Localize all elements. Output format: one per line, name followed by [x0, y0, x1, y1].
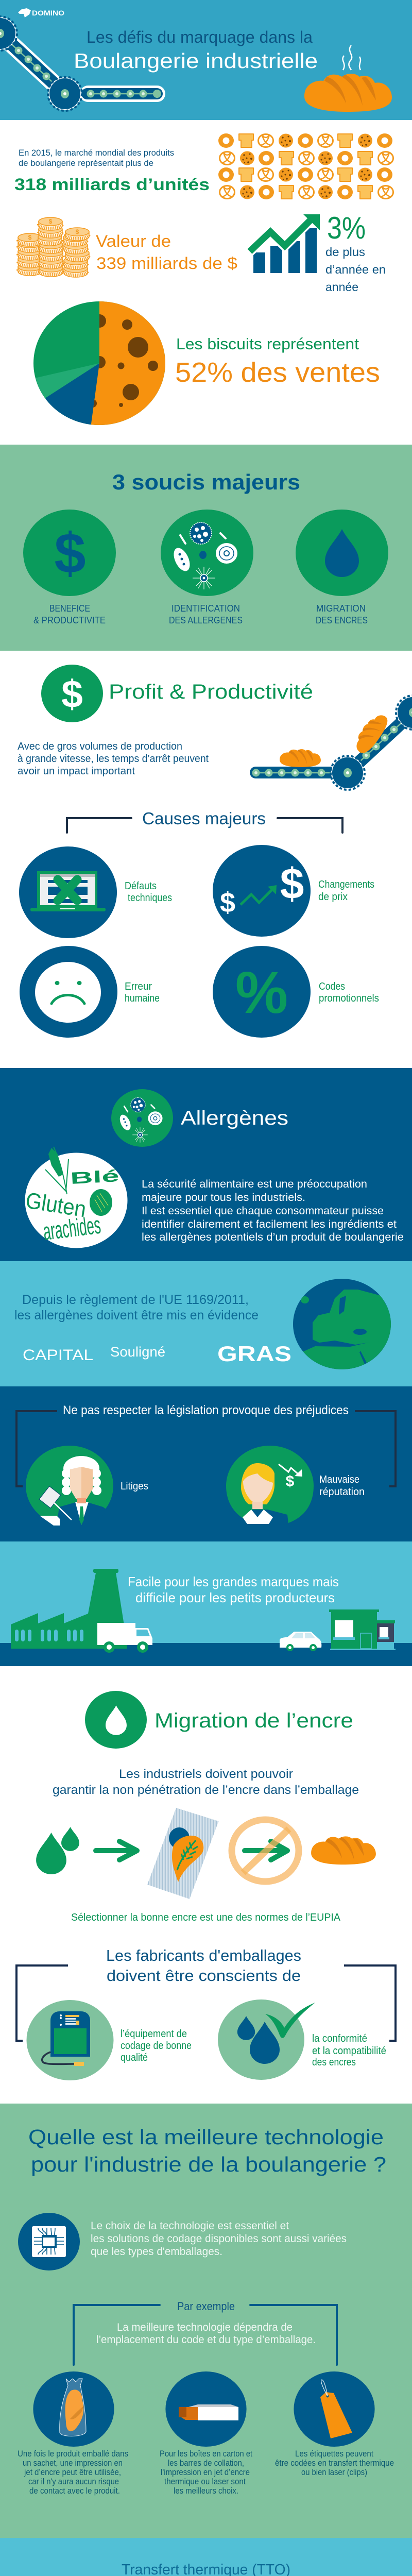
paragraph: La sécurité alimentaire est une préoccupation [142, 1178, 367, 1190]
illustration: car [280, 1632, 321, 1651]
icon: reputation [226, 1446, 314, 1525]
heading: Causes majeurs [142, 809, 266, 828]
icon: germs [111, 1089, 173, 1147]
icon: tag [294, 2371, 375, 2447]
icon: packaging [147, 1808, 218, 1899]
label: changements de prix [318, 879, 374, 903]
panel: migration de l'encre [16, 1691, 396, 2080]
icon: dollar [41, 665, 103, 722]
bracket [74, 2305, 337, 2365]
logo: Domino [18, 8, 64, 18]
title line 2: Boulangerie industrielle [74, 49, 318, 73]
label: allergenes: IDENTIFICATION [171, 603, 240, 614]
paragraph [142, 1178, 404, 1243]
caption: box: Pour les boîtes en carton et [160, 2449, 252, 2459]
icon: globe europe [293, 1279, 391, 1369]
label: benefice [33, 603, 106, 625]
caption: bag: de contact avec le produit. [29, 2486, 120, 2496]
icon: percent: % [235, 960, 288, 1026]
paragraph: à grande vitesse, les temps d’arrêt peuvent [18, 753, 209, 765]
label: encres: DES ENCRES [316, 615, 368, 625]
caption: bag: Une fois le produit emballé dans [18, 2449, 128, 2459]
icon: bread loaf [304, 74, 392, 112]
label: equipement [121, 2028, 192, 2063]
icon: no migration [232, 1820, 299, 1882]
chart: rising bars with arrow [250, 214, 320, 273]
icon: ink drops [36, 1827, 79, 1874]
icon: drop [85, 1691, 147, 1749]
stat: 3 percent growth [325, 211, 386, 294]
caption: box [160, 2449, 252, 2496]
panel: header [0, 0, 412, 120]
paragraph: Les industriels doivent pouvoir [119, 1767, 293, 1781]
text: best technology [96, 2321, 316, 2346]
text: brands: difficile pour les petits producteurs [135, 1590, 335, 1605]
icon: steam [342, 45, 360, 70]
heading: 3 soucis majeurs [112, 470, 300, 494]
icon: dollar: $ [61, 672, 83, 716]
label: defauts techniques [125, 880, 172, 904]
text: market intro [19, 148, 174, 168]
chart: cookie pie [33, 301, 165, 425]
icon: coin stacks [18, 217, 89, 277]
label: conformite [312, 2033, 386, 2068]
label: encres [316, 603, 368, 625]
paragraph: que les types d'emballages. [91, 2246, 222, 2258]
text: best technology: La meilleure technologie dépendra de [117, 2321, 293, 2333]
panel: meilleure technologie [0, 2104, 412, 2538]
stat: 3 percent growth: de plus [325, 245, 365, 259]
heading: Ne pas respecter la législation provoque des préjudices [63, 1403, 349, 1417]
icon: laptop [19, 846, 117, 938]
icon: box [165, 2371, 247, 2447]
icon: compliant drops [218, 1999, 315, 2080]
caption: tag: être codées en transfert thermique [275, 2458, 394, 2468]
label: conformite: des encres [312, 2057, 356, 2068]
panel: 3 soucis majeurs [0, 445, 412, 651]
caption: box: thermique ou laser sont [164, 2477, 246, 2486]
icon: coin stacks: $ [28, 234, 32, 241]
text: biscuits share [175, 335, 380, 388]
heading: Migration de l’encre [154, 1709, 353, 1732]
icon: profit circle: $ [54, 522, 86, 585]
label: benefice: BENEFICE [49, 603, 90, 614]
label: defauts techniques: Défauts [125, 880, 157, 892]
label: equipement: codage de bonne [121, 2040, 192, 2052]
label: par exemple: Par exemple [177, 2300, 235, 2313]
text: market intro: de boulangerie représentait plus de [19, 158, 153, 168]
stat: 3 percent growth: 3% [327, 211, 366, 245]
caption: box: l'impression en jet d’encre [161, 2467, 250, 2477]
label: benefice: & PRODUCTIVITE [33, 615, 106, 625]
icon: sad face [20, 946, 117, 1038]
icon: reputation: $ [286, 1473, 295, 1490]
label: changements de prix: de prix [318, 891, 348, 903]
heading: fabricants [106, 1946, 301, 1985]
text: regulation: Depuis le règlement de l'UE 1169/2011, [22, 1293, 249, 1307]
bracket [16, 1411, 396, 1486]
label: codes promotionnels: Codes [319, 981, 345, 992]
sample: gras: GRAS [217, 1342, 291, 1366]
icon: coin stacks: $ [76, 228, 79, 235]
icon: coin stacks: $ [49, 218, 53, 225]
caption: bag: un sachet, une impression en [23, 2458, 123, 2468]
paragraph [91, 2220, 347, 2258]
paragraph: Avec de gros volumes de production [18, 741, 182, 752]
stat: 318 milliards: 318 milliards d’unités [14, 175, 210, 194]
panel: allergenes [0, 1068, 412, 1261]
sample: souligne: Souligné [110, 1344, 165, 1360]
paragraph: majeure pour tous les industriels. [142, 1192, 305, 1204]
caption: box: les barres de collation, [168, 2458, 244, 2468]
badge: ble gluten arachides: Blé [70, 1166, 119, 1188]
label: mauvaise reputation [319, 1474, 365, 1498]
paragraph: les solutions de codage disponibles sont aussi variées [91, 2233, 347, 2245]
text: brands: Facile pour les grandes marques mais [128, 1574, 339, 1589]
panel: reglement UE [0, 1261, 412, 1386]
bracket [16, 1965, 396, 2041]
heading: Allergènes [181, 1107, 288, 1129]
label: defauts techniques: techniques [128, 892, 172, 904]
paragraph: garantir la non pénétration de l’encre dans l’emballage [53, 1783, 359, 1797]
panel: transfert thermique [0, 2538, 412, 2576]
title line 1: Les défis du marquage dans la [87, 28, 313, 46]
stat: market value: Valeur de [96, 232, 171, 250]
caption: bag: car il n'y aura aucun risque [28, 2477, 119, 2486]
heading [28, 2125, 386, 2176]
label: conformite: la conformité [312, 2033, 367, 2044]
text: best technology: l’emplacement du code et du type d’emballage. [96, 2334, 316, 2346]
caption: tag: Les étiquettes peuvent [295, 2449, 373, 2459]
icon: price rise [213, 845, 311, 937]
icon: percent [213, 946, 311, 1038]
label: mauvaise reputation: réputation [319, 1486, 365, 1498]
label: allergenes [169, 603, 243, 625]
panel: producteurs [0, 1541, 412, 1666]
icon: ink circle [296, 510, 388, 596]
paragraph [18, 741, 209, 777]
label: changements de prix: Changements [318, 879, 374, 890]
label: equipement: l’équipement de [121, 2028, 187, 2040]
heading: Quelle est la meilleure technologie [28, 2125, 384, 2149]
illustration: small shop [329, 1609, 396, 1650]
badge: ble gluten arachides [24, 1147, 128, 1248]
badge: ble gluten arachides: arachides [42, 1212, 102, 1246]
label: erreur humaine [125, 981, 160, 1004]
icon: bag [33, 2371, 114, 2447]
caption: bag [18, 2449, 128, 2496]
caption: box: les meilleurs choix. [174, 2486, 238, 2496]
caption: Sélectionner la bonne encre est une des normes de l’EUPIA [71, 1912, 341, 1923]
label: erreur humaine: humaine [125, 993, 160, 1004]
label: litiges: Litiges [121, 1481, 148, 1492]
paragraph [53, 1767, 359, 1797]
label: allergenes: DES ALLERGENES [169, 615, 243, 625]
label: conformite: et la compatibilité [312, 2045, 386, 2057]
text: market intro: En 2015, le marché mondial des produits [19, 148, 174, 158]
label: equipement: qualité [121, 2052, 148, 2063]
conveyor illustration [0, 16, 165, 111]
illustration: factory [11, 1569, 127, 1649]
text: regulation [14, 1293, 259, 1323]
stat: market value: 339 milliards de $ [96, 254, 237, 273]
stat: market value [96, 232, 237, 273]
icon grid: bakery products [218, 133, 393, 199]
icon: allergens circle [161, 510, 253, 596]
text: biscuits share: 52% des ventes [175, 357, 380, 388]
icon: chip [18, 2213, 80, 2270]
label: codes promotionnels [319, 981, 379, 1004]
heading: Profit & Productivité [109, 681, 313, 703]
label: encres: MIGRATION [316, 603, 366, 614]
stat: 3 percent growth: année [325, 280, 358, 294]
badge: ble gluten arachides: Gluten [24, 1188, 88, 1222]
label: codes promotionnels: promotionnels [319, 993, 379, 1004]
caption: tag [275, 2449, 394, 2477]
label: mauvaise reputation: Mauvaise [319, 1474, 359, 1485]
panel: prejudices [0, 1386, 412, 1541]
paragraph: Il est essentiel que chaque consommateur puisse [142, 1205, 384, 1217]
sample: capital: CAPITAL [23, 1347, 93, 1364]
illustration: truck [97, 1623, 152, 1653]
logo: Domino: DOMINO [32, 9, 64, 17]
conveyor with bread [250, 696, 412, 790]
heading: pour l'industrie de la boulangerie ? [31, 2153, 386, 2176]
text: biscuits share: Les biscuits représentent [176, 335, 359, 353]
heading: fabricants: doivent être conscients de [107, 1967, 301, 1985]
icon: price rise: $ [280, 859, 304, 908]
icon: printer [27, 2000, 113, 2080]
arrow [96, 1841, 137, 1860]
icon: judge [26, 1446, 113, 1526]
text: regulation: les allergènes doivent être mis en évidence [14, 1308, 259, 1323]
icon: price rise: $ [220, 887, 235, 918]
paragraph: Le choix de la technologie est essentiel et [91, 2220, 289, 2232]
bracket [67, 818, 342, 833]
text: brands [128, 1574, 339, 1605]
heading: fabricants: Les fabricants d'emballages [106, 1946, 301, 1964]
caption: tag: ou bien laser (clips) [301, 2467, 367, 2477]
panel: causes majeurs [19, 809, 379, 1038]
icon: profit circle [23, 510, 116, 596]
label: erreur humaine: Erreur [125, 981, 152, 992]
icon: bread [311, 1836, 376, 1865]
paragraph: avoir un impact important [18, 766, 135, 777]
paragraph: les allergènes potentiels d’un produit de boulangerie [142, 1231, 404, 1243]
panel: profit et productivite [18, 665, 412, 790]
paragraph: identifier clairement et facilement les ingrédients et [142, 1218, 397, 1230]
caption: bag: jet d’encre peut être utilisée, [24, 2467, 121, 2477]
stat: 3 percent growth: d’année en [325, 263, 386, 276]
